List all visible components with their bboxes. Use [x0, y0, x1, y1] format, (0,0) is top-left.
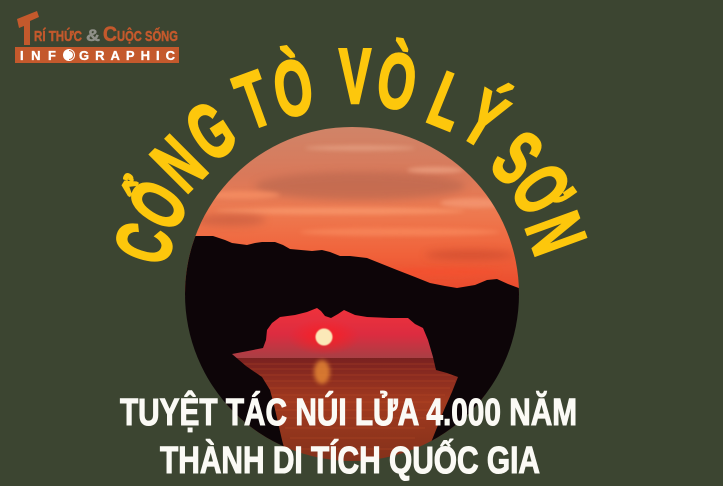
logo banner	[15, 47, 179, 63]
title: CỔNG TÒ VÒ LÝ SƠN: Ổ	[111, 165, 205, 244]
title: CỔNG TÒ VÒ LÝ SƠN: Ò	[268, 42, 319, 134]
subtitle line 1: TUYỆT TÁC NÚI LỬA 4.000 NĂM	[120, 390, 577, 434]
logo: Trí Thức & Cuộc Sống Infographic: INF	[20, 48, 56, 63]
logo mark: roof T	[17, 11, 39, 45]
title: CỔNG TÒ VÒ LÝ SƠN	[97, 32, 603, 273]
rock arch silhouette	[185, 236, 519, 446]
subtitle line 2: THÀNH DI TÍCH QUỐC GIA	[160, 437, 540, 482]
title: CỔNG TÒ VÒ LÝ SƠN: N	[509, 202, 603, 265]
title: CỔNG TÒ VÒ LÝ SƠN: V	[339, 32, 371, 120]
sky	[185, 127, 519, 297]
title: CỔNG TÒ VÒ LÝ SƠN: N	[135, 120, 222, 207]
logo: Trí Thức & Cuộc Sống Infographic: GRAPHIC	[79, 48, 176, 63]
title: CỔNG TÒ VÒ LÝ SƠN: Ò	[372, 35, 422, 127]
sun glow	[296, 324, 352, 352]
sea	[225, 358, 485, 468]
title: CỔNG TÒ VÒ LÝ SƠN: C	[97, 213, 191, 273]
logo: Trí Thức & Cuộc Sống Infographic	[15, 11, 179, 63]
title: CỔNG TÒ VÒ LÝ SƠN: L	[418, 55, 478, 147]
title: CỔNG TÒ VÒ LÝ SƠN: S	[476, 114, 559, 201]
infographic canvas	[15, 11, 588, 481]
title: CỔNG TÒ VÒ LÝ SƠN: Ơ	[494, 148, 590, 233]
title: CỔNG TÒ VÒ LÝ SƠN: Ý	[448, 73, 521, 165]
logo wordmark: &	[86, 26, 100, 45]
clouds	[200, 144, 512, 262]
sky through arch	[232, 308, 434, 358]
sea ripples	[240, 364, 455, 449]
logo wordmark: C	[103, 23, 117, 46]
subtitle	[120, 390, 577, 482]
sunset photo circle	[180, 127, 524, 470]
logo wordmark	[34, 23, 178, 46]
title: CỔNG TÒ VÒ LÝ SƠN: G	[171, 84, 250, 178]
logo disc glyph	[63, 49, 75, 61]
sun reflection	[314, 360, 330, 384]
sun	[316, 328, 332, 346]
title: CỔNG TÒ VÒ LÝ SƠN: T	[224, 54, 282, 146]
logo wordmark: RÍ THỨC	[34, 27, 82, 45]
logo wordmark: UỘC SỐNG	[117, 27, 178, 45]
